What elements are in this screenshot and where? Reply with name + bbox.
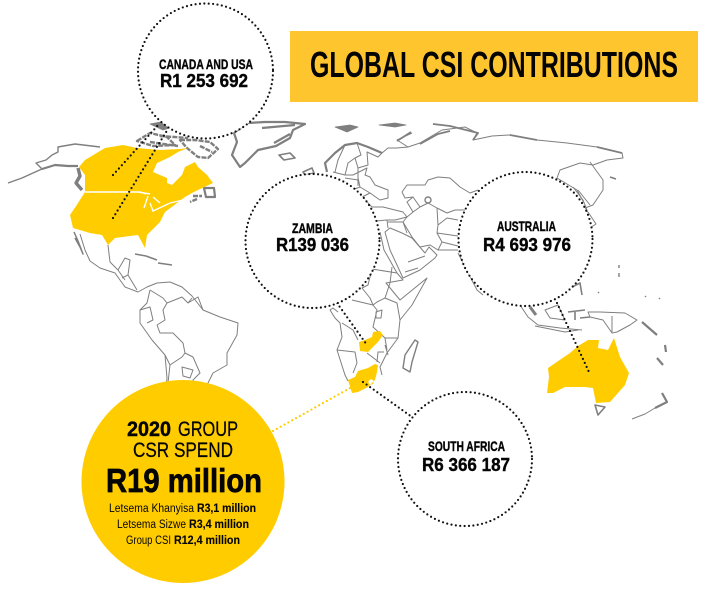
map: South America: [140, 282, 238, 400]
spend breakdown: R3,1 million: [197, 503, 256, 515]
map: South East Asia: [458, 253, 657, 335]
callout: Zambia: R139 036: [276, 234, 349, 255]
callout: Zambia: ZAMBIA: [292, 220, 333, 236]
spend breakdown: [109, 503, 256, 547]
spend breakdown: Letsema Khanyisa: [109, 503, 195, 515]
countries: Canada and USA: [70, 145, 213, 248]
map: Middle East and Arabia: [385, 220, 437, 278]
world map outlines: [8, 121, 667, 419]
heading: 2020 group CSR spend: 2020: [127, 418, 171, 441]
callout: Canada and USA: R1 253 692: [160, 70, 248, 91]
callout: Australia: [458, 172, 592, 306]
highlighted countries: [70, 145, 629, 403]
map: Greenland, Iceland and Svalbard: [232, 122, 406, 175]
heading: 2020 group CSR spend: [127, 418, 238, 462]
leader lines: [113, 123, 589, 431]
country: South Africa: [348, 364, 378, 393]
map: Europe: [325, 143, 407, 221]
callout: Zambia: [246, 174, 380, 308]
map: Tasmania, New Zealand and Pacific islands: [595, 265, 667, 419]
heading: 2020 group CSR spend: GROUP: [178, 418, 238, 441]
callout: Canada and USA: [138, 4, 273, 138]
map: Mexico and Central America: [74, 232, 172, 292]
map: Africa: [330, 232, 427, 381]
callout: South Africa: R6 366 187: [422, 454, 510, 475]
heading: 2020 group CSR spend: CSR SPEND: [133, 439, 233, 462]
callout: Australia: R4 693 976: [483, 234, 571, 255]
map: Alaska and Arctic Canada: [8, 121, 218, 202]
callout: Canada and USA: CANADA AND USA: [159, 56, 253, 72]
country: Zambia: [359, 331, 383, 352]
map: Madagascar: [403, 340, 418, 372]
spend breakdown: Letsema Sizwe: [117, 519, 186, 531]
spend breakdown: R3,4 million: [189, 519, 249, 531]
callout: Australia: AUSTRALIA: [497, 218, 556, 234]
spend breakdown: R12,4 million: [174, 535, 240, 547]
total spend figure: R19 million: [106, 462, 262, 499]
country: Australia: [547, 338, 629, 403]
map: Russia, Central Asia and East Asia: [382, 124, 623, 250]
callout: South Africa: [398, 392, 532, 526]
spend breakdown: Group CSI: [126, 535, 171, 547]
panel: 2020 group CSR spend: [82, 380, 284, 583]
title banner: [290, 31, 698, 102]
callout: South Africa: SOUTH AFRICA: [428, 438, 505, 454]
